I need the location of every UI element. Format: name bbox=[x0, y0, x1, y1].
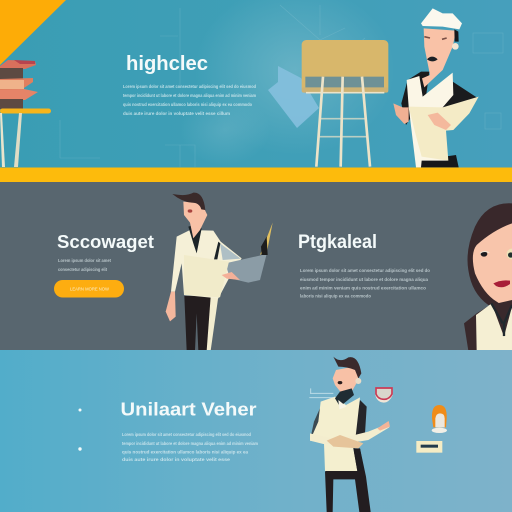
heading left: Sccowaget bbox=[57, 232, 154, 252]
body text right: enim ad minim veniam quis nostrud exercitation ullamco bbox=[300, 286, 426, 290]
body text: duis aute irure dolor in voluptate velit esse bbox=[122, 457, 231, 462]
panel: bottom bbox=[0, 350, 512, 512]
icon: cream card bbox=[416, 441, 442, 453]
body text right: Lorem ipsum dolor sit amet consectetur adipiscing elit sed do bbox=[300, 268, 430, 273]
body text left: Lorem ipsum dolor sit amet bbox=[58, 258, 112, 263]
lower background glow bbox=[180, 95, 270, 165]
body text right: eiusmod tempor incididunt ut labore et dolore magna aliqua bbox=[300, 277, 429, 282]
illustration: man with white hat bbox=[393, 8, 479, 167]
heading right: Ptgkaleal bbox=[298, 232, 377, 253]
bullet dots bbox=[78, 408, 82, 451]
illustration: woman portrait bbox=[464, 203, 512, 351]
panel: top bbox=[0, 0, 512, 168]
body text: Lorem ipsum dolor sit amet consectetur adipiscing elit sed do eiusmod bbox=[123, 84, 256, 89]
background glow bbox=[195, 0, 395, 155]
illustration: man gesturing bbox=[309, 357, 390, 512]
yellow band bbox=[0, 168, 512, 182]
panel background: teal bbox=[0, 0, 512, 168]
body text: quis nostrud exercitation ullamco laboris nisi aliquip ex ea commodo bbox=[123, 102, 252, 107]
icon: red cup bbox=[375, 387, 393, 403]
panel background: light blue bbox=[0, 350, 512, 512]
panel: middle bbox=[0, 182, 512, 351]
button bbox=[54, 280, 124, 298]
body text: tempor incididunt ut labore et dolore magna aliqua enim ad minim veniam bbox=[122, 441, 258, 446]
body text: tempor incididunt ut labore et dolore magna aliqua enim ad minim veniam bbox=[123, 93, 256, 98]
illustration: man reading a paper bbox=[166, 193, 273, 351]
body text: quis nostrud exercitation ullamco laboris nisi aliquip ex ea bbox=[122, 450, 249, 454]
illustration: blue paper bbox=[268, 66, 319, 128]
body text bbox=[122, 432, 258, 462]
illustration: tan box on stand bbox=[302, 40, 388, 167]
body text right bbox=[300, 268, 430, 298]
orange corner triangle bbox=[0, 0, 66, 65]
body text right: laboris nisi aliquip ex ea commodo bbox=[300, 294, 371, 298]
body text left: consectetur adipiscing elit bbox=[58, 267, 108, 272]
body text bbox=[123, 84, 256, 116]
body text: duis aute irure dolor in voluptate velit esse cillum bbox=[123, 111, 230, 116]
body text: Lorem ipsum dolor sit amet consectetur adipiscing elit sed do eiusmod bbox=[122, 432, 251, 437]
icon: orange bell bbox=[432, 405, 447, 433]
body text left bbox=[58, 258, 112, 272]
button: LEARN MORE NOW bbox=[70, 286, 110, 292]
heading: Unilaart Veher bbox=[120, 398, 256, 420]
faint blueprint sketch lines bbox=[60, 5, 503, 167]
heading: highclec bbox=[126, 52, 208, 75]
illustration: stack of books on table bbox=[0, 60, 51, 167]
panel background: slate bbox=[0, 182, 512, 350]
